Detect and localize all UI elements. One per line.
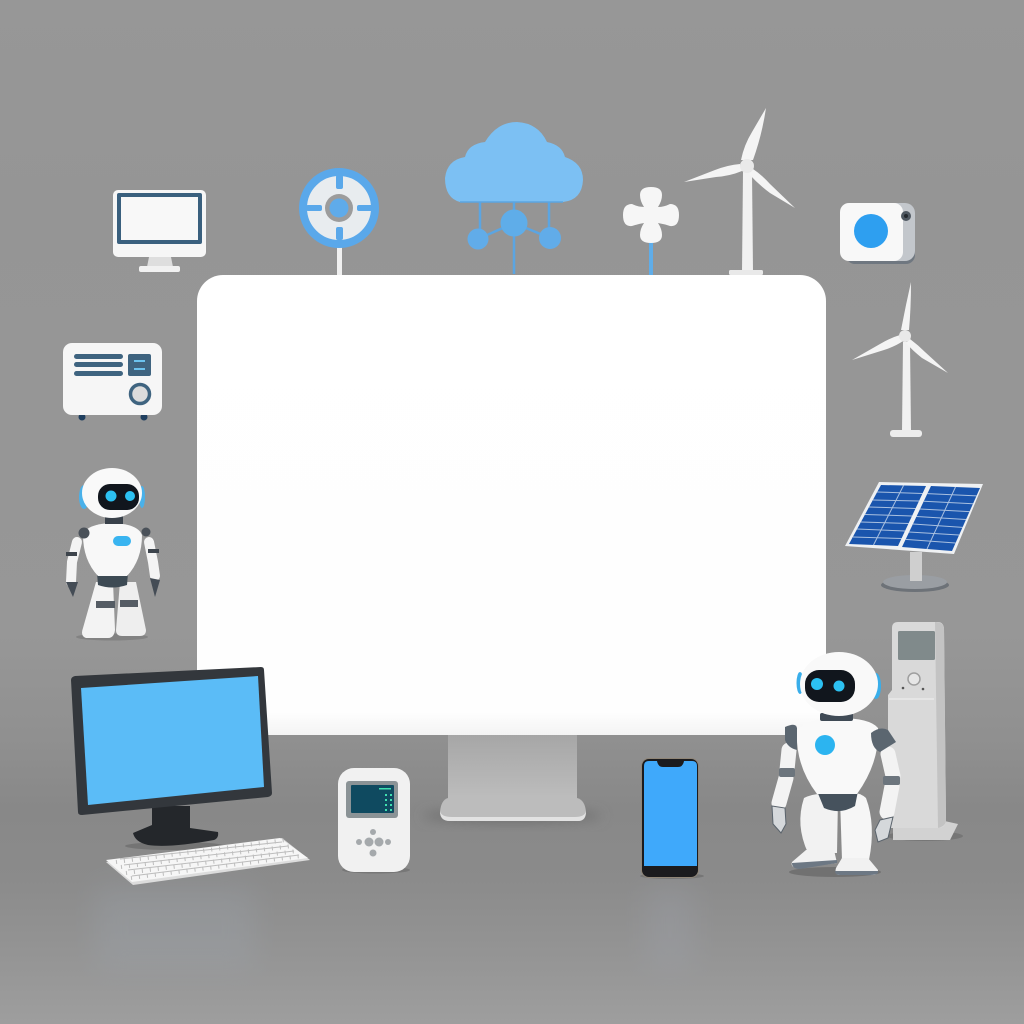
icon: keyboard (106, 838, 310, 885)
icon: large blue desktop monitor (71, 667, 272, 850)
icon: cloud network (445, 122, 583, 274)
icon: large wind turbine (684, 108, 795, 275)
floor reflections (95, 885, 695, 970)
icon: small robot left (66, 468, 160, 640)
icon: monitor stand under the central panel (422, 734, 602, 822)
icon: handheld thermostat device (338, 768, 410, 874)
icon: kiosk terminal (887, 622, 963, 841)
icon: target dial on post (303, 172, 375, 275)
icon: smart speaker camera (840, 203, 915, 264)
icon: smartphone (640, 758, 704, 879)
icon: small desktop monitor (113, 190, 206, 272)
icon: large robot right (772, 652, 900, 877)
icon: white fan on post (623, 187, 679, 275)
panel: central blank screen (197, 275, 826, 735)
icon: small wind turbine (852, 282, 948, 437)
icon: solar panel (845, 482, 983, 592)
icon: air conditioner unit (63, 343, 162, 420)
